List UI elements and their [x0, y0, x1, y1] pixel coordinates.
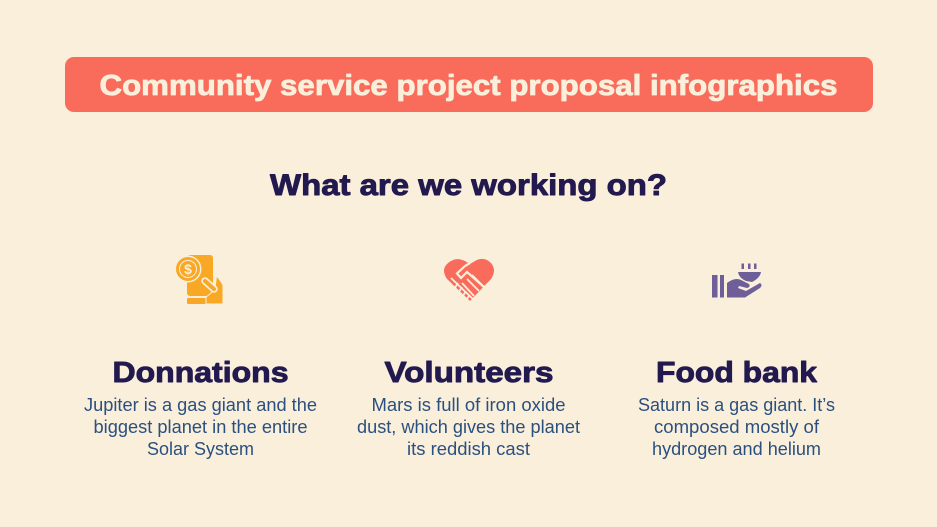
heading: Volunteers: Volunteers — [384, 357, 554, 389]
text: food bank description: composed mostly of — [654, 417, 820, 437]
icon: coin and hand holding phone — [174, 255, 223, 304]
icon: handshake heart — [444, 259, 494, 301]
panel: food bank — [638, 264, 835, 459]
text: volunteers description: Mars is full of iron oxide — [372, 395, 566, 415]
text: volunteers description: its reddish cast — [407, 439, 530, 459]
text: donations description: Jupiter is a gas giant and the — [84, 395, 317, 415]
panel: volunteers — [357, 259, 580, 459]
text: volunteers description: dust, which gives the planet — [357, 417, 580, 437]
heading: Donnations: Donnations — [112, 357, 288, 389]
icon: hand serving food — [712, 264, 762, 298]
text: donations description — [84, 395, 317, 459]
subtitle heading: What are we working on? — [270, 169, 667, 202]
text: donations description: Solar System — [147, 439, 254, 459]
text: food bank description — [638, 395, 835, 459]
text: food bank description: Saturn is a gas giant. It’s — [638, 395, 835, 415]
title banner — [65, 57, 873, 112]
text: donations description: biggest planet in the entire — [94, 417, 308, 437]
text: food bank description: hydrogen and helium — [652, 439, 821, 459]
panel: donations — [84, 255, 317, 459]
title banner: Community service project proposal infographics — [100, 70, 838, 102]
icon: coin and hand holding phone: $ — [184, 261, 192, 277]
heading: Food bank: Food bank — [656, 357, 818, 389]
text: volunteers description — [357, 395, 580, 459]
